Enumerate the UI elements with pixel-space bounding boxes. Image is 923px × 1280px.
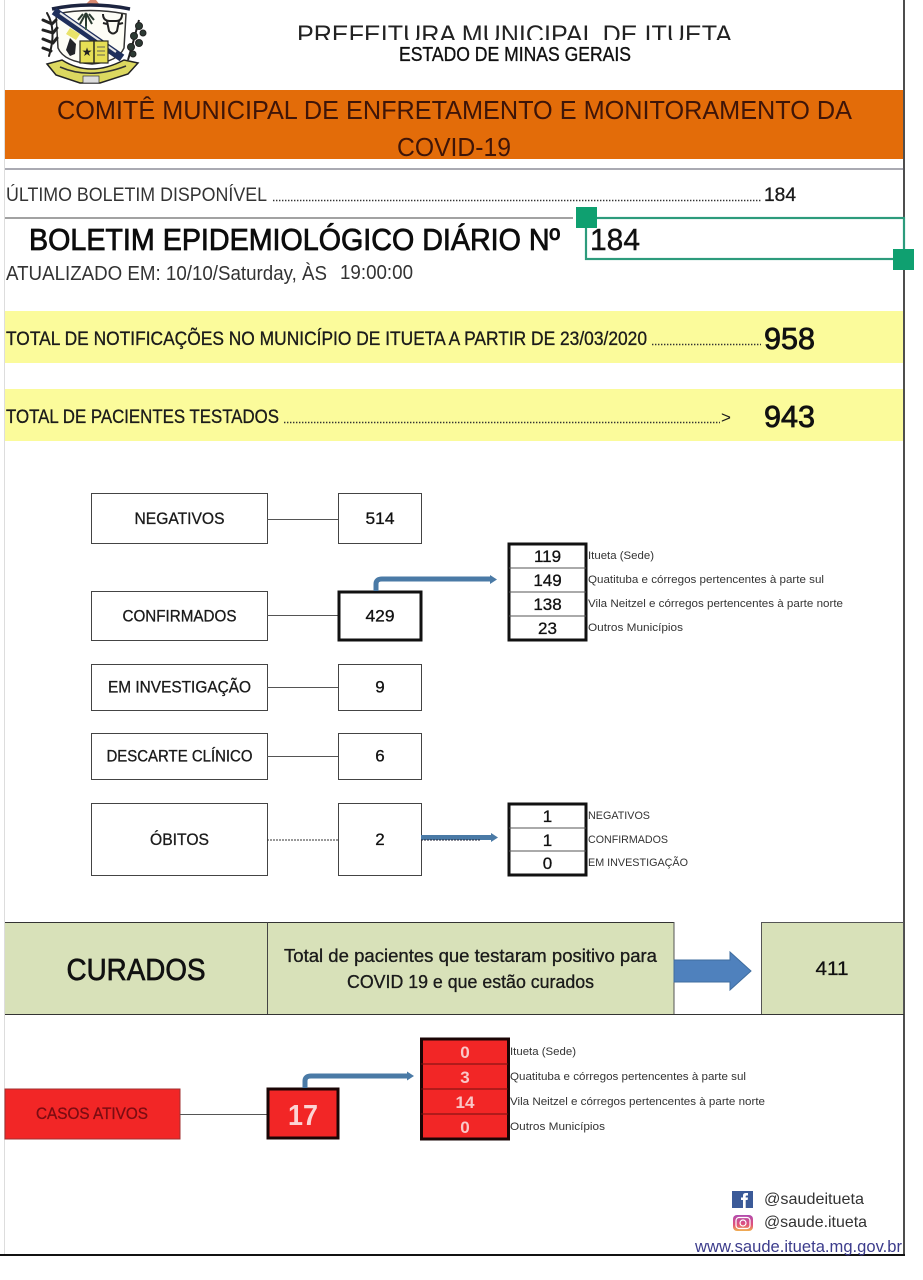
table: confirmados by location: Vila Neitzel e córregos pertencentes à parte norte [588,598,843,610]
icon detail: book: ★ [82,45,92,59]
box: curados total [762,922,904,1014]
table: confirmados by location: Quatituba e córregos pertencentes à parte sul [588,574,824,586]
arrow: curados to total [674,952,751,990]
table: óbitos breakdown: 1 [543,831,552,850]
text: instagram handle: @saude.itueta [764,1214,867,1231]
table: casos ativos by location: Quatituba e córregos pertencentes à parte sul [510,1071,746,1083]
banner: comitê municipal: COVID-19 [397,132,511,162]
text: facebook handle: @saudeitueta [764,1191,864,1208]
band: total de pacientes testados: > [721,408,731,427]
table: casos ativos by location: Vila Neitzel e córregos pertencentes à parte norte [510,1096,765,1108]
row: em investigação: EM INVESTIGAÇÃO [108,678,251,696]
row: descarte clínico: 6 [375,746,385,766]
table: confirmados by location [509,544,843,640]
row: negativos [92,494,422,544]
icon detail: left wreath [43,13,57,56]
text: último boletim disponível [6,184,796,206]
icon detail: cow head [103,14,123,34]
row: casos ativos [5,1089,338,1139]
panel: curados: CURADOS [66,952,206,987]
row: em investigação [92,664,422,710]
table: confirmados by location: Itueta (Sede) [588,550,654,562]
table: casos ativos by location: 0 [460,1118,470,1137]
icon detail: palm [78,13,94,30]
arrow: óbitos to breakdown [421,833,498,842]
table: óbitos breakdown: NEGATIVOS [588,810,650,822]
row: óbitos: 2 [375,830,385,849]
table: casos ativos by location: 14 [456,1093,475,1112]
band: total de pacientes testados: 943 [764,399,815,434]
band: total de pacientes testados [5,389,903,441]
band: total de notificações: 958 [764,321,815,356]
banner: comitê municipal [5,90,903,162]
icon detail: scroll [47,60,138,83]
icon detail: right plant [128,20,146,60]
icon: municipal coat of arms [43,0,146,83]
row: óbitos [92,804,422,876]
row: óbitos: ÓBITOS [150,830,209,849]
text: atualizado em: ATUALIZADO EM: 10/10/Saturday, ÀS [6,262,327,285]
table: casos ativos by location: 0 [460,1043,470,1062]
table: casos ativos by location: Itueta (Sede) [510,1046,576,1058]
text: último boletim disponível: 184 [764,185,796,206]
title: prefeitura: PREFEITURA MUNICIPAL DE ITUETA [297,21,732,49]
band: total de pacientes testados: TOTAL DE PACIENTES TESTADOS [6,407,279,428]
table: confirmados by location: 119 [534,547,561,566]
row: negativos: NEGATIVOS [134,509,224,528]
band: total de notificações [5,311,903,363]
panel: curados: Total de pacientes que testaram positivo para [284,946,658,966]
row: confirmados: 429 [366,606,394,626]
selection frame: green [576,207,914,270]
row: casos ativos: CASOS ATIVOS [36,1104,148,1123]
number: boletim 184: 184 [590,222,640,257]
table: confirmados by location: 149 [533,571,562,590]
box: curados total: 411 [816,959,848,980]
table: confirmados by location: Outros Municípios [588,622,684,634]
row: descarte clínico: DESCARTE CLÍNICO [106,746,252,766]
row: descarte clínico [92,734,422,780]
table: casos ativos by location: 3 [460,1068,470,1087]
icon: instagram [733,1215,753,1231]
banner: comitê municipal: COMITÊ MUNICIPAL DE ENFRETAMENTO E MONITORAMENTO DA [57,95,853,125]
table: óbitos breakdown: 0 [543,854,552,873]
arrow: casos ativos to breakdown [305,1072,414,1088]
row: confirmados: CONFIRMADOS [122,606,236,626]
table: casos ativos by location [421,1039,765,1139]
table: casos ativos by location: Outros Municípios [510,1121,606,1133]
band: total de notificações: TOTAL DE NOTIFICAÇÕES NO MUNICÍPIO DE ITUETA A PARTIR DE 23/03/2020 [6,328,647,350]
table: óbitos breakdown: 1 [543,807,552,826]
row: confirmados [92,592,421,640]
table: confirmados by location: 138 [533,595,562,614]
text: website: www.saude.itueta.mg.gov.br [694,1238,902,1256]
table: óbitos breakdown [509,804,688,875]
row: negativos: 514 [366,509,394,528]
text: atualizado em: 19:00:00 [340,262,413,284]
subtitle: estado: ESTADO DE MINAS GERAIS [399,44,631,66]
table: confirmados by location: 23 [538,619,557,638]
arrow: confirmados to breakdown [376,575,497,591]
table: óbitos breakdown: EM INVESTIGAÇÃO [588,856,688,869]
row: casos ativos: 17 [288,1100,318,1132]
heading: boletim epidemiológico diário: BOLETIM EPIDEMIOLÓGICO DIÁRIO Nº [29,222,560,257]
icon: facebook [732,1191,753,1208]
text: último boletim disponível: ÚLTIMO BOLETIM DISPONÍVEL [6,184,267,206]
row: em investigação: 9 [375,678,385,696]
table: óbitos breakdown: CONFIRMADOS [588,834,668,846]
panel: curados: COVID 19 e que estão curados [347,972,594,992]
panel: curados [5,922,674,1014]
